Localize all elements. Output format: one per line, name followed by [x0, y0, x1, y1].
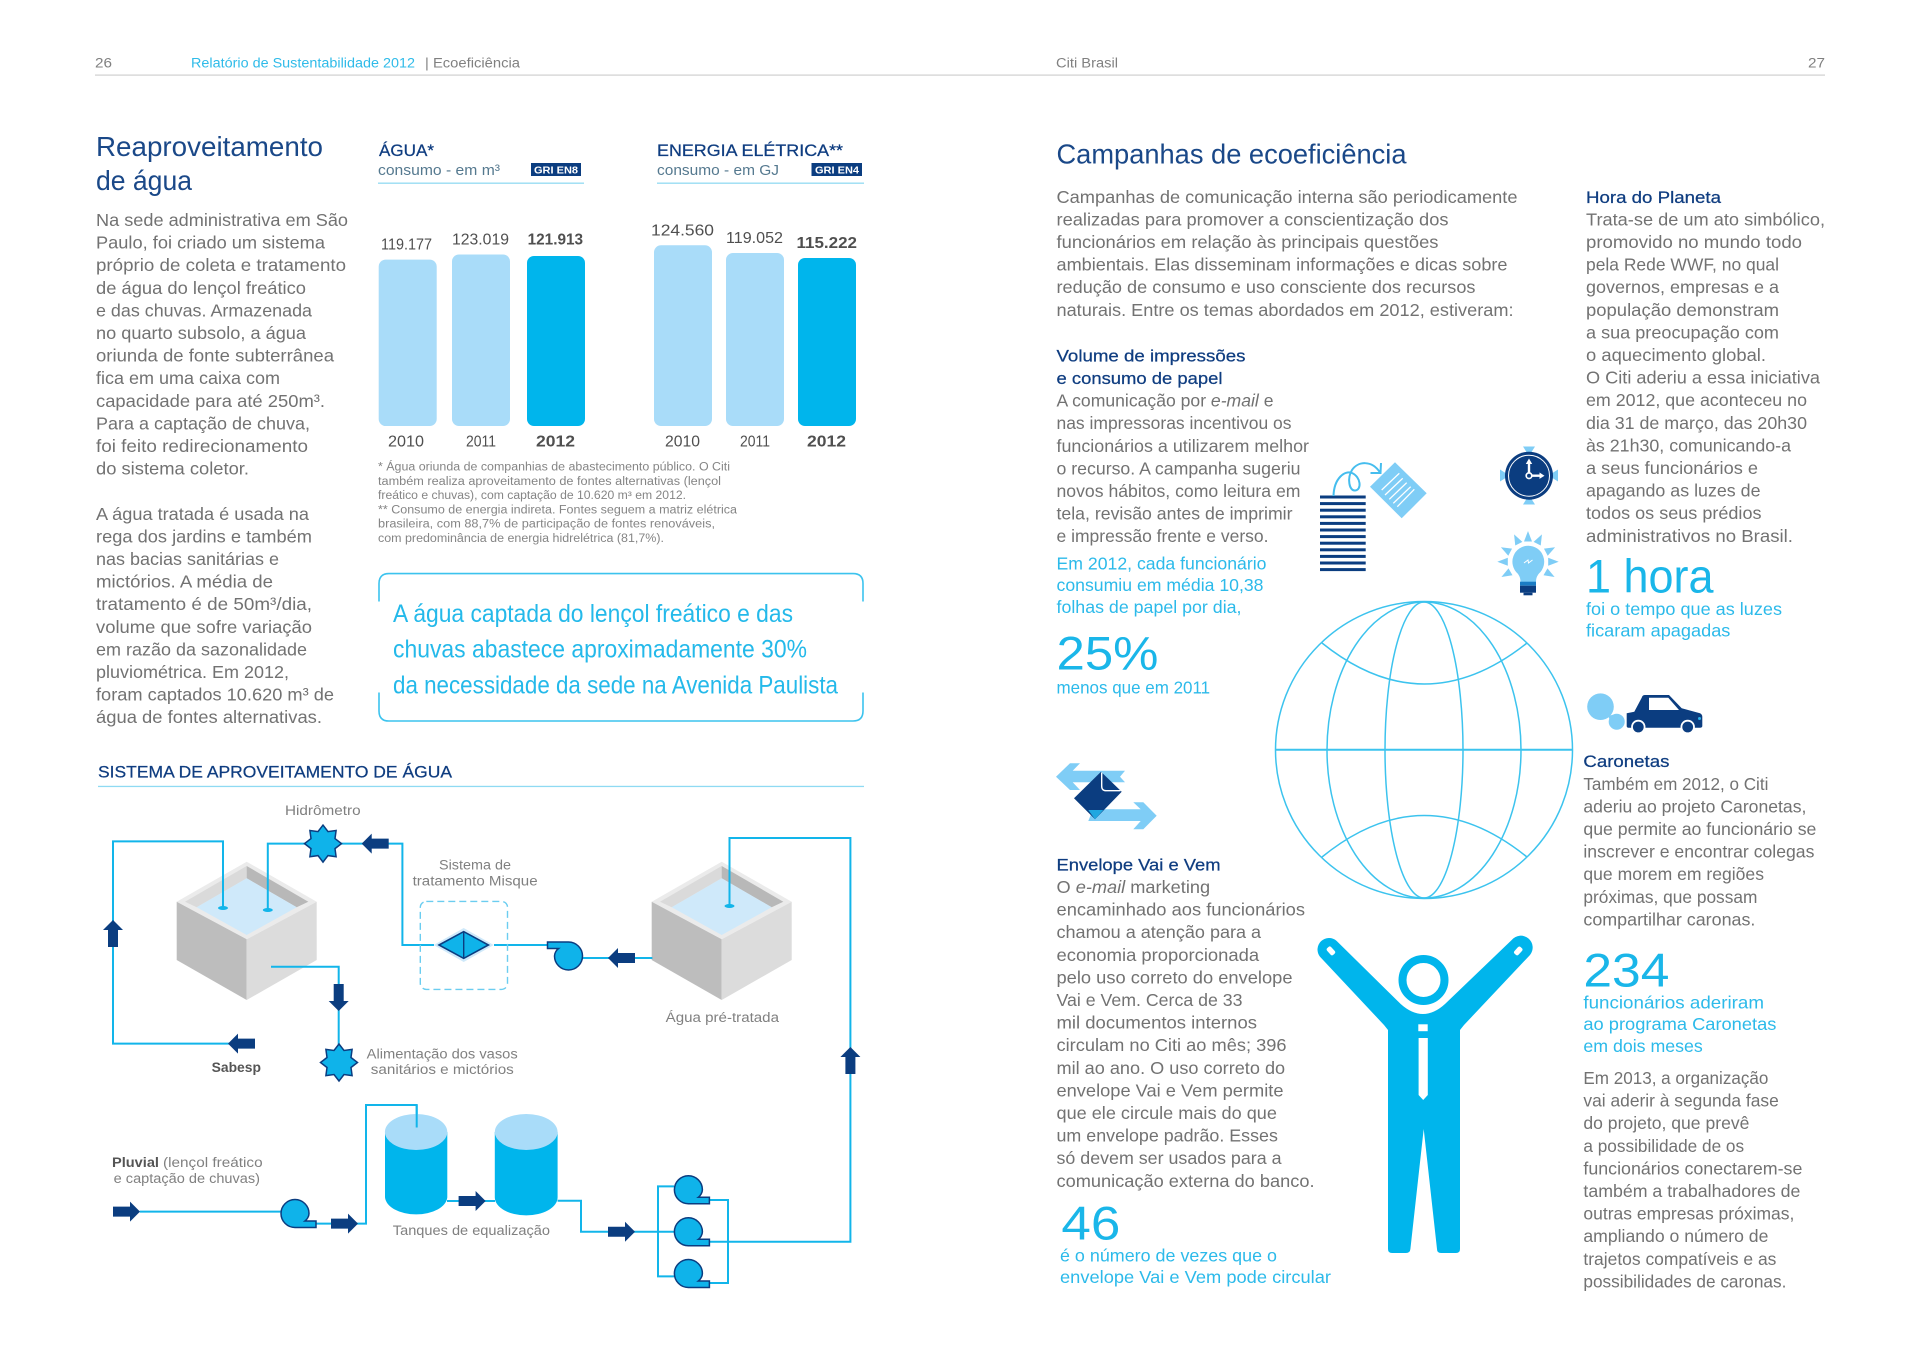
body text: economia proporcionada — [1056, 945, 1259, 965]
second body text — [1583, 1068, 1802, 1291]
body text: dia 31 de março, das 20h30 — [1586, 413, 1807, 433]
text block: water reuse body: Paulo, foi criado um sistema — [96, 233, 325, 253]
body text: O e-mail marketing — [1056, 877, 1210, 897]
stat caption — [1586, 599, 1782, 640]
bar values: 119.052 — [726, 230, 783, 247]
diagram labels: (lençol freático — [163, 1155, 263, 1170]
left page number: 26 — [95, 56, 112, 70]
water outlets — [218, 904, 734, 912]
year labels: 2012 — [536, 434, 575, 450]
chart unit: energia: consumo - em GJ — [657, 162, 779, 179]
sheet — [1370, 462, 1427, 518]
body text: circulam no Citi ao mês; 396 — [1056, 1035, 1286, 1055]
text block: water reuse body: capacidade para até 250m³. — [96, 391, 325, 411]
callout: 30% of water: da necessidade da sede na Avenida Paulista — [393, 672, 838, 700]
year labels — [665, 434, 846, 450]
body text: em 2012, que aconteceu no — [1586, 390, 1807, 410]
diagram labels: tratamento Misque — [413, 874, 538, 889]
body text: O Citi aderiu a essa iniciativa — [1586, 368, 1820, 388]
chart heading: água: ÁGUA* — [379, 141, 434, 160]
text block: water reuse body: tratamento é de 50m³/dia, — [96, 594, 312, 614]
second body text: funcionários conectarem-se — [1583, 1158, 1802, 1178]
cyan highlight text — [1056, 554, 1266, 617]
body text: população demonstram — [1586, 300, 1779, 320]
text block: water reuse body: água de fontes alternativas. — [96, 707, 322, 727]
heading: Reaproveitamento de água — [96, 131, 323, 196]
flow arrows — [103, 834, 860, 1242]
body text: envelope Vai e Vem permite — [1056, 1080, 1284, 1100]
big number: 25%: 25% — [1056, 627, 1158, 680]
stat caption: é o número de vezes que o — [1060, 1246, 1277, 1266]
right page number: 27 — [1808, 56, 1825, 70]
footnotes: * Água oriunda de companhias de abastecimento público. O Citi — [378, 460, 730, 474]
callout: 30% of water: A água captada do lençol freático e das — [393, 600, 793, 628]
text block: campaigns intro: Campanhas de comunicação interna são periodicamente — [1056, 187, 1518, 207]
diagram labels: Hidrômetro — [285, 803, 361, 818]
diagram labels: Sistema de — [439, 858, 511, 873]
bar values — [651, 223, 857, 252]
body text: A comunicação por e-mail e — [1056, 391, 1274, 411]
footnotes: ** Consumo de energia indireta. Fontes seguem a matriz elétrica — [378, 504, 738, 516]
second body text: Em 2013, a organização — [1583, 1068, 1768, 1088]
stat caption: em dois meses — [1583, 1036, 1703, 1056]
text block: water reuse body: no quarto subsolo, a água — [96, 323, 306, 343]
bar values: 123.019 — [452, 231, 509, 248]
text block: water reuse body: foram captados 10.620 m³ de — [96, 685, 334, 705]
year labels — [388, 434, 575, 450]
diagram labels: Água pré-tratada — [666, 1010, 780, 1025]
bar: 2010 — [654, 245, 712, 426]
big number: 46: 46 — [1061, 1197, 1120, 1250]
curling arrow — [1334, 463, 1381, 496]
body text: pelo uso correto do envelope — [1056, 967, 1292, 987]
body text: nas impressoras incentivou os — [1056, 413, 1292, 433]
body text: apagando as luzes de — [1586, 481, 1760, 501]
icon: clock — [1500, 446, 1558, 504]
bar values: 119.177 — [381, 236, 432, 254]
year labels: 2010 — [388, 434, 424, 450]
subheading: Hora do Planeta — [1586, 188, 1722, 207]
diagram labels: sanitários e mictórios — [371, 1062, 514, 1077]
diagram labels — [112, 803, 780, 1238]
bar: 2011 — [726, 253, 784, 426]
text block: water reuse body: fica em uma caixa com — [96, 368, 280, 388]
body text: mil documentos internos — [1056, 1013, 1257, 1033]
second body text: outras empresas próximas, — [1583, 1204, 1794, 1224]
text block: water reuse body: Na sede administrativa em São — [96, 210, 348, 230]
footnotes — [378, 460, 738, 545]
body text: Vai e Vem. Cerca de 33 — [1056, 990, 1242, 1010]
bar values: 121.913 — [528, 231, 583, 248]
year labels: 2011 — [740, 434, 770, 450]
icon: person with raised arms — [1318, 936, 1533, 1253]
subheading — [1056, 346, 1246, 388]
bar: 2010 — [379, 260, 437, 426]
footnotes: com predominância de energia hidrelétrica (81,7%). — [378, 533, 664, 545]
body text: mil ao ano. O uso correto do — [1056, 1058, 1285, 1078]
text block: campaigns intro: funcionários em relação às principais questões — [1056, 232, 1439, 252]
footnotes: brasileira, com 88,7% de participação de fontes renováveis, — [378, 518, 715, 530]
text block: campaigns intro: realizadas para promover a conscientização dos — [1056, 209, 1449, 229]
text block: water reuse body: rega dos jardins e também — [96, 526, 312, 546]
bar chart: água — [378, 141, 585, 450]
cyan highlight text: folhas de papel por dia, — [1056, 597, 1242, 617]
bar: 2012 — [527, 256, 585, 426]
body text — [1583, 774, 1816, 929]
chart unit: água: consumo - em m³ — [378, 162, 500, 179]
chart heading: energia: ENERGIA ELÉTRICA** — [657, 141, 843, 160]
callout: 30% of water: chuvas abastece aproximadamente 30% — [393, 636, 807, 664]
body text: a sua preocupação com — [1586, 322, 1779, 342]
stat caption — [1060, 1246, 1331, 1287]
bar: 2012 — [798, 258, 856, 426]
body text: um envelope padrão. Esses — [1056, 1126, 1278, 1146]
second body text: ampliando o número de — [1583, 1226, 1768, 1246]
text block: water reuse body: Para a captação de chuva, — [96, 413, 310, 433]
diagram labels: Pluvial — [112, 1155, 159, 1170]
heading: sistema de aproveitamento de água: SISTEMA DE APROVEITAMENTO DE ÁGUA — [98, 762, 453, 782]
footnotes: freático e chuvas), com captação de 10.620 m³ em 2012. — [378, 490, 686, 502]
heading: Campanhas de ecoeficiência: Campanhas de ecoeficiência — [1056, 139, 1407, 170]
badge: GRI EN8: GRI EN8 — [534, 164, 578, 176]
body text: e impressão frente e verso. — [1056, 526, 1268, 546]
body text: Também em 2012, o Citi — [1583, 774, 1768, 794]
body text: próximas, que possam — [1583, 887, 1757, 907]
subheading: Caronetas — [1583, 752, 1669, 771]
stat caption: envelope Vai e Vem pode circular — [1060, 1267, 1331, 1287]
text block: water reuse body — [96, 210, 348, 727]
body text: o recurso. A campanha sugeriu — [1056, 458, 1300, 478]
cyan highlight text: Em 2012, cada funcionário — [1056, 554, 1266, 574]
second body text: vai aderir à segunda fase — [1583, 1091, 1779, 1111]
text block: water reuse body: nas bacias sanitárias e — [96, 549, 279, 569]
body text: o aquecimento global. — [1586, 345, 1766, 365]
second body text: a possibilidade de os — [1583, 1136, 1744, 1156]
body text: só devem ser usados para a — [1056, 1148, 1282, 1168]
equalization tanks — [385, 1114, 558, 1215]
second body text: também a trabalhadores de — [1583, 1181, 1800, 1201]
text block: campaigns intro: ambientais. Elas disseminam informações e dicas sobre — [1056, 255, 1508, 275]
tank: treated water — [177, 862, 317, 1000]
body text: Trata-se de um ato simbólico, — [1586, 209, 1825, 229]
body text: comunicação externa do banco. — [1056, 1171, 1314, 1191]
text block: campaigns intro: naturais. Entre os temas abordados em 2012, estiveram: — [1056, 300, 1514, 320]
body text: tela, revisão antes de imprimir — [1056, 504, 1293, 524]
treatment system box — [420, 901, 508, 989]
body text: chamou a atenção para a — [1056, 922, 1261, 942]
text block: water reuse body: volume que sofre variação — [96, 617, 312, 637]
footnotes: também realiza aproveitamento de fontes alternativas (lençol — [378, 476, 721, 488]
text block: campaigns intro: redução de consumo e uso consciente dos recursos — [1056, 277, 1476, 297]
stat caption: ficaram apagadas — [1586, 620, 1731, 640]
paper stack — [1320, 496, 1366, 571]
body text — [1056, 391, 1309, 546]
stat caption: menos que em 2011 — [1056, 678, 1210, 698]
icon: globe — [1276, 602, 1572, 898]
text block: campaigns intro — [1056, 187, 1518, 320]
body text: novos hábitos, como leitura em — [1056, 481, 1300, 501]
body text: todos os seus prédios — [1586, 503, 1762, 523]
text block: water reuse body: de água do lençol freático — [96, 278, 306, 298]
text block: water reuse body: do sistema coletor. — [96, 459, 249, 479]
icon: car with exhaust — [1587, 693, 1702, 733]
exhaust — [1587, 693, 1625, 730]
second body text: do projeto, que prevê — [1583, 1113, 1749, 1133]
panel: envelope vai e vem — [1056, 855, 1331, 1287]
supply star — [320, 1044, 358, 1081]
stat caption — [1583, 992, 1777, 1056]
diagram labels: Sabesp — [212, 1060, 261, 1075]
panel: hora do planeta — [1586, 188, 1825, 641]
bar values: 124.560 — [651, 223, 714, 240]
year labels: 2010 — [665, 434, 700, 450]
bar: 2011 — [452, 254, 510, 426]
body text: que morem em regiões — [1583, 864, 1764, 884]
text block: water reuse body: pluviométrica. Em 2012, — [96, 662, 289, 682]
second body text: trajetos compatíveis e as — [1583, 1249, 1777, 1269]
stat caption: funcionários aderiram — [1583, 992, 1764, 1012]
car body — [1627, 695, 1702, 728]
icon: envelope with two-way arrows — [1056, 763, 1157, 829]
diagram labels: Alimentação dos vasos — [367, 1047, 518, 1062]
icon: light bulb — [1497, 531, 1559, 595]
panel: caronetas — [1583, 752, 1816, 1291]
bar chart: energia elétrica — [651, 141, 864, 450]
body text: governos, empresas e a — [1586, 277, 1779, 297]
big number: 234: 234 — [1583, 944, 1669, 997]
heading: Reaproveitamento de água: Reaproveitamento — [96, 131, 323, 162]
diagram labels: e captação de chuvas) — [114, 1171, 260, 1186]
page header — [95, 56, 1825, 76]
text block: water reuse body: oriunda de fonte subterrânea — [96, 346, 334, 366]
subheading: Volume de impressões — [1056, 346, 1246, 365]
text block: water reuse body: foi feito redirecionamento — [96, 436, 308, 456]
subheading: e consumo de papel — [1056, 369, 1222, 388]
text block: water reuse body: em razão da sazonalidade — [96, 639, 307, 659]
text block: water reuse body: mictórios. A média de — [96, 572, 273, 592]
cyan highlight text: consumiu em média 10,38 — [1056, 575, 1264, 595]
body text: pela Rede WWF, no qual — [1586, 255, 1779, 275]
body text: inscrever e encontrar colegas — [1583, 842, 1815, 862]
subheading: Envelope Vai e Vem — [1056, 855, 1220, 874]
text block: water reuse body: e das chuvas. Armazenada — [96, 300, 312, 320]
badge: GRI EN4: GRI EN4 — [815, 164, 859, 176]
heading: Reaproveitamento de água: de água — [96, 165, 192, 196]
pumps — [281, 942, 709, 1288]
body text: encaminhado aos funcionários — [1056, 900, 1305, 920]
body text: compartilhar caronas. — [1583, 909, 1755, 929]
year labels: 2012 — [807, 434, 846, 450]
body text: funcionários a utilizarem melhor — [1056, 436, 1309, 456]
callout: 30% of water — [379, 574, 863, 721]
year labels: 2011 — [466, 434, 496, 450]
body text — [1586, 209, 1825, 546]
body text: a seus funcionários e — [1586, 458, 1758, 478]
text block: water reuse body: próprio de coleta e tratamento — [96, 255, 346, 275]
icon: paper stack and sheet — [1320, 462, 1427, 571]
body text: aderiu ao projeto Caronetas, — [1583, 796, 1806, 816]
body text: às 21h30, comunicando-a — [1586, 435, 1791, 455]
panel: volume de impressões — [1056, 346, 1309, 698]
second body text: possibilidades de caronas. — [1583, 1271, 1786, 1291]
text block: water reuse body: A água tratada é usada na — [96, 504, 309, 524]
body text — [1056, 877, 1314, 1191]
body text: que permite ao funcionário se — [1583, 819, 1816, 839]
tank: pre-treated water — [652, 862, 792, 1000]
body text: que ele circule mais do que — [1056, 1103, 1277, 1123]
stat caption: ao programa Caronetas — [1583, 1014, 1777, 1034]
bar values — [381, 231, 583, 254]
flow diagram: water reuse system — [103, 803, 860, 1288]
stat caption: foi o tempo que as luzes — [1586, 599, 1782, 619]
hydrometer star — [304, 825, 342, 862]
body text: administrativos no Brasil. — [1586, 526, 1793, 546]
report title: Relatório de Sustentabilidade 2012 — [191, 56, 415, 70]
big number: 1 hora: 1 hora — [1586, 550, 1714, 603]
body text: promovido no mundo todo — [1586, 232, 1802, 252]
brand name: Citi Brasil — [1056, 56, 1118, 70]
section name: | Ecoeficiência — [425, 56, 521, 70]
diagram labels: Tanques de equalização — [393, 1223, 550, 1238]
pipes — [113, 838, 850, 1283]
bar values: 115.222 — [796, 235, 857, 252]
